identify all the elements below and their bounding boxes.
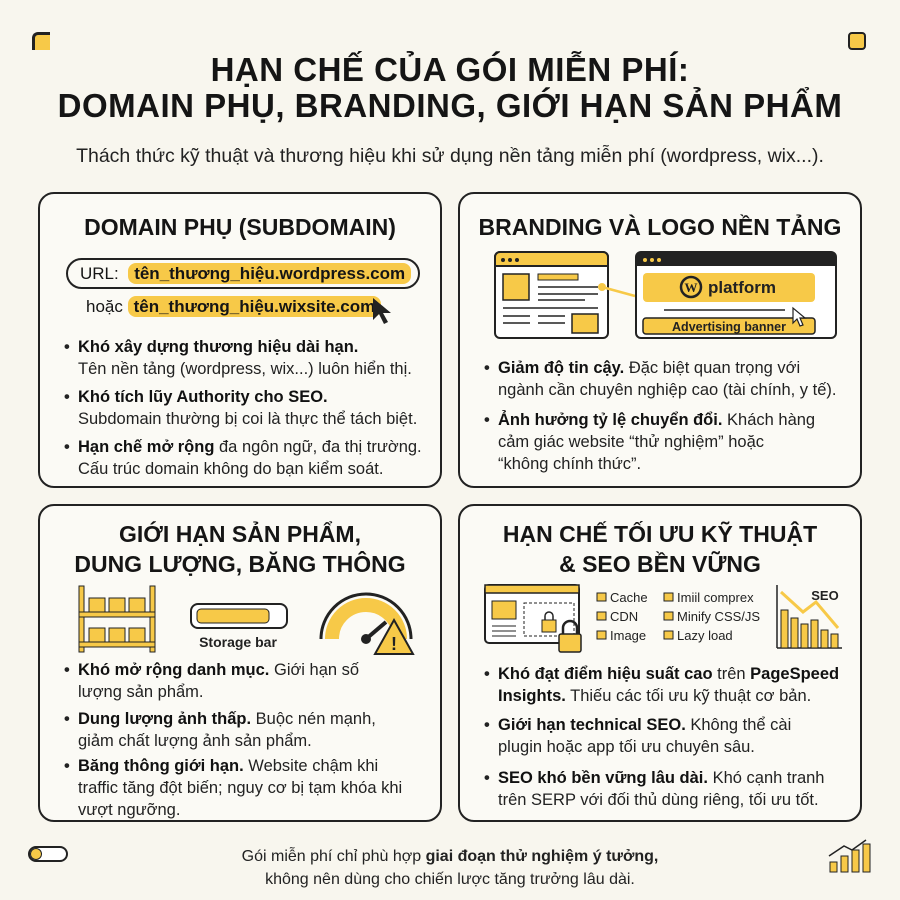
panel: giới hạn sản phẩm: [38, 504, 442, 822]
bullet 3: Cấu trúc domain không do bạn kiểm soát.: [78, 460, 383, 478]
heading: [74, 521, 406, 577]
illustration: browser windows: W: [684, 280, 698, 295]
bullet 2: [78, 386, 428, 430]
url box: URL: tên_thương_hiệu.wordpress.com: [80, 264, 405, 283]
heading: DUNG LƯỢNG, BĂNG THÔNG: [74, 551, 406, 577]
heading: GIỚI HẠN SẢN PHẨM,: [119, 521, 361, 547]
icons: locked browser, lock list, seo chart: Imiil comprex: [677, 590, 754, 605]
bullet 2: “không chính thức”.: [498, 455, 641, 473]
icons: shelf, storage bar, gauge: Storage bar: [199, 634, 277, 650]
bullet 2: Subdomain thường bị coi là thực thể tách biệt.: [78, 410, 417, 428]
heading: BRANDING VÀ LOGO NỀN TẢNG: [479, 214, 841, 240]
heading: [503, 521, 817, 577]
panel: hạn chế kỹ thuật: [458, 504, 862, 822]
url box: [66, 258, 420, 289]
icons: locked browser, lock list, seo chart: Minify CSS/JS: [677, 609, 760, 624]
icons: locked browser, lock list, seo chart: [484, 584, 842, 653]
illustration: browser windows: [494, 251, 837, 339]
bullet 3: [78, 436, 438, 480]
subtitle: Thách thức kỹ thuật và thương hiệu khi sử dụng nền tảng miễn phí (wordpress, wix...).: [76, 145, 824, 167]
bullet 1: Khó xây dựng thương hiệu dài hạn.: [78, 338, 358, 356]
icons: locked browser, lock list, seo chart: CDN: [610, 609, 638, 624]
alt url: hoặc tên_thương_hiệu.wixsite.com: [86, 297, 375, 316]
bullet 2: Giới hạn technical SEO. Không thể cài plugin hoặc app tối ưu chuyên sâu.: [498, 716, 791, 756]
bullet 2: Ảnh hưởng tỷ lệ chuyển đổi. Khách hàng: [498, 411, 815, 429]
bullet 2: [498, 409, 858, 475]
heading: & SEO BỀN VỮNG: [559, 551, 761, 577]
bullet 2: Dung lượng ảnh thấp. Buộc nén mạnh, giảm chất lượng ảnh sản phẩm.: [78, 710, 376, 750]
panel: domain phụ: [38, 192, 442, 488]
bullet 1: Giảm độ tin cậy. Đặc biệt quan trọng với ngành cần chuyên nghiệp cao (tài chính, y tế).: [498, 359, 836, 399]
bullet 3: Băng thông giới hạn. Website chậm khi traffic tăng đột biến; nguy cơ bị tạm khóa khi vượt ngưỡng.: [78, 757, 402, 819]
icon: cursor: [373, 298, 391, 324]
footer text: không nên dùng cho chiến lược tăng trưởng lâu dài.: [265, 871, 635, 888]
bullet 3: SEO khó bền vững lâu dài. Khó cạnh tranh trên SERP với đối thủ dùng riêng, tối ưu tốt.: [498, 769, 824, 809]
panel: branding: [458, 192, 862, 488]
heading: HẠN CHẾ TỐI ƯU KỸ THUẬT: [503, 521, 817, 547]
bullet 2: cảm giác website “thử nghiệm” hoặc: [498, 433, 764, 451]
decorative corner icon top-right: [848, 32, 866, 50]
title: DOMAIN PHỤ, BRANDING, GIỚI HẠN SẢN PHẨM: [58, 87, 842, 124]
icons: locked browser, lock list, seo chart: Cache: [610, 590, 648, 605]
title: [58, 51, 842, 124]
bullet 1: Tên nền tảng (wordpress, wix...) luôn hiển thị.: [78, 360, 412, 378]
icon: toggle bottom-left: [28, 846, 68, 862]
icons: shelf, storage bar, gauge: [78, 586, 415, 655]
bullet 1: [78, 336, 428, 380]
heading: DOMAIN PHỤ (SUBDOMAIN): [84, 214, 396, 240]
bullet 1: Khó mở rộng danh mục. Giới hạn số lượng sản phẩm.: [78, 661, 359, 701]
decorative corner icon top-left: [32, 32, 50, 50]
icons: locked browser, lock list, seo chart: SEO: [811, 588, 839, 603]
icons: locked browser, lock list, seo chart: Lazy load: [677, 628, 733, 643]
icons: locked browser, lock list, seo chart: Image: [610, 628, 646, 643]
bullet 3: Hạn chế mở rộng đa ngôn ngữ, đa thị trường.: [78, 438, 422, 456]
bullet 2: Khó tích lũy Authority cho SEO.: [78, 388, 328, 406]
title: HẠN CHẾ CỦA GÓI MIỄN PHÍ:: [211, 51, 689, 88]
icons: shelf, storage bar, gauge: !: [391, 634, 397, 654]
bullet 1: Khó đạt điểm hiệu suất cao trên PageSpeed Insights. Thiếu các tối ưu kỹ thuật cơ bản.: [498, 665, 839, 705]
icon: growth chart bottom-right: [828, 839, 870, 872]
illustration: browser windows: platform: [708, 278, 776, 297]
footer text: [242, 847, 658, 888]
footer text: Gói miễn phí chỉ phù hợp giai đoạn thử nghiệm ý tưởng,: [242, 848, 658, 865]
illustration: browser windows: Advertising banner: [672, 320, 786, 334]
